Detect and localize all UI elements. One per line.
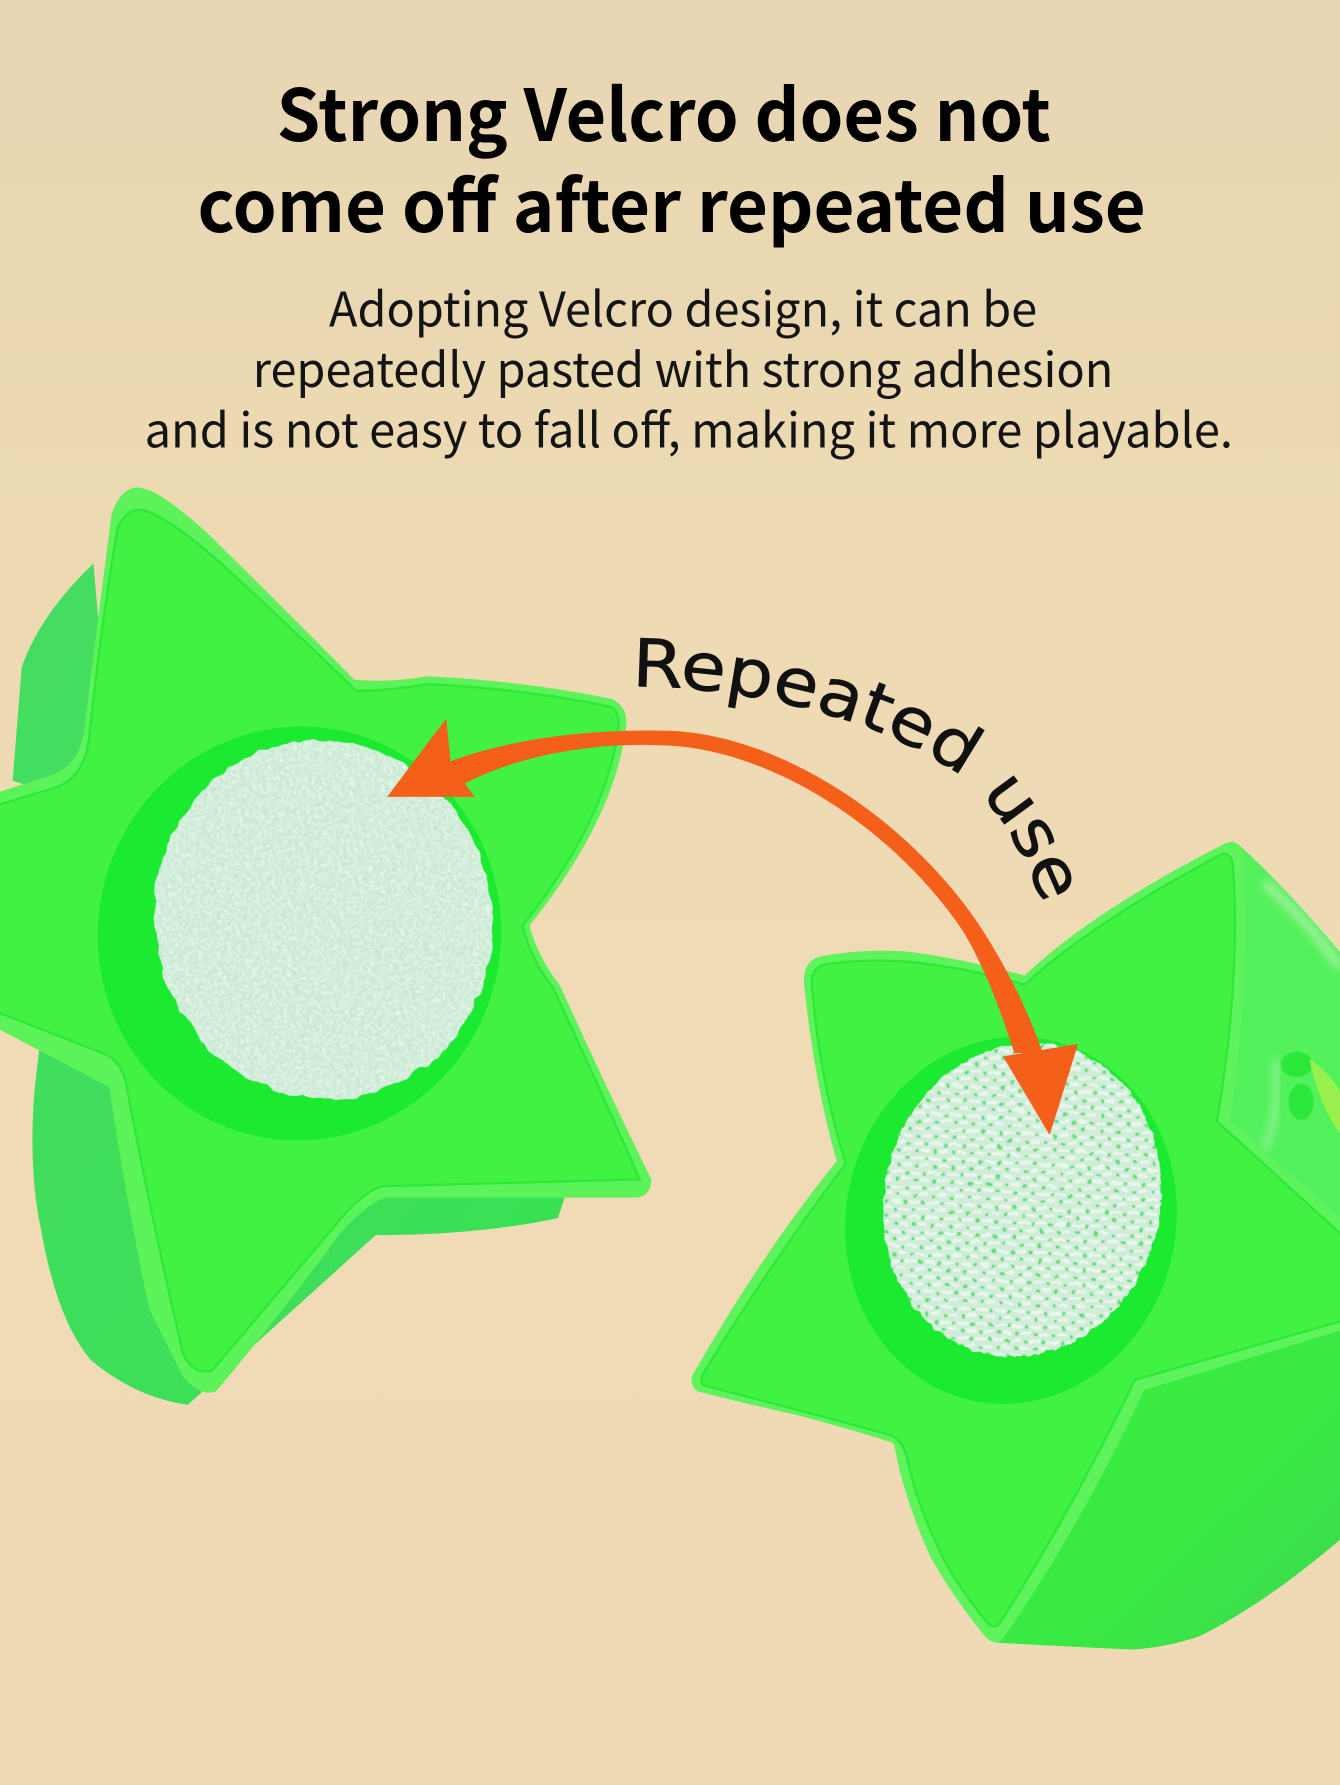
left star rim xyxy=(0,487,651,1393)
left green star toy xyxy=(0,487,651,1405)
right recess xyxy=(811,1006,1211,1435)
title: Strong Velcro does not xyxy=(277,58,1051,162)
curved label: Repeated use: Repeated use xyxy=(638,638,1072,900)
right toy body xyxy=(997,1315,1340,1650)
description text: Adopting Velcro design, it can be xyxy=(329,272,1037,341)
right velcro patch xyxy=(848,1011,1196,1388)
title xyxy=(198,58,1146,253)
left recess xyxy=(59,689,540,1178)
left star face xyxy=(0,510,640,1371)
left toy body xyxy=(13,564,569,1405)
title: come off after repeated use xyxy=(198,149,1146,253)
description text: repeatedly pasted with strong adhesion xyxy=(253,332,1113,401)
right green star toy xyxy=(692,842,1340,1650)
right star rim xyxy=(692,842,1340,1642)
double-headed orange arrow xyxy=(387,718,1078,1135)
description text xyxy=(145,272,1233,461)
description text: and is not easy to fall off, making it more playable. xyxy=(145,392,1233,461)
right star face xyxy=(701,854,1340,1626)
left velcro patch xyxy=(121,709,526,1131)
right toy side panel xyxy=(1215,845,1340,1247)
